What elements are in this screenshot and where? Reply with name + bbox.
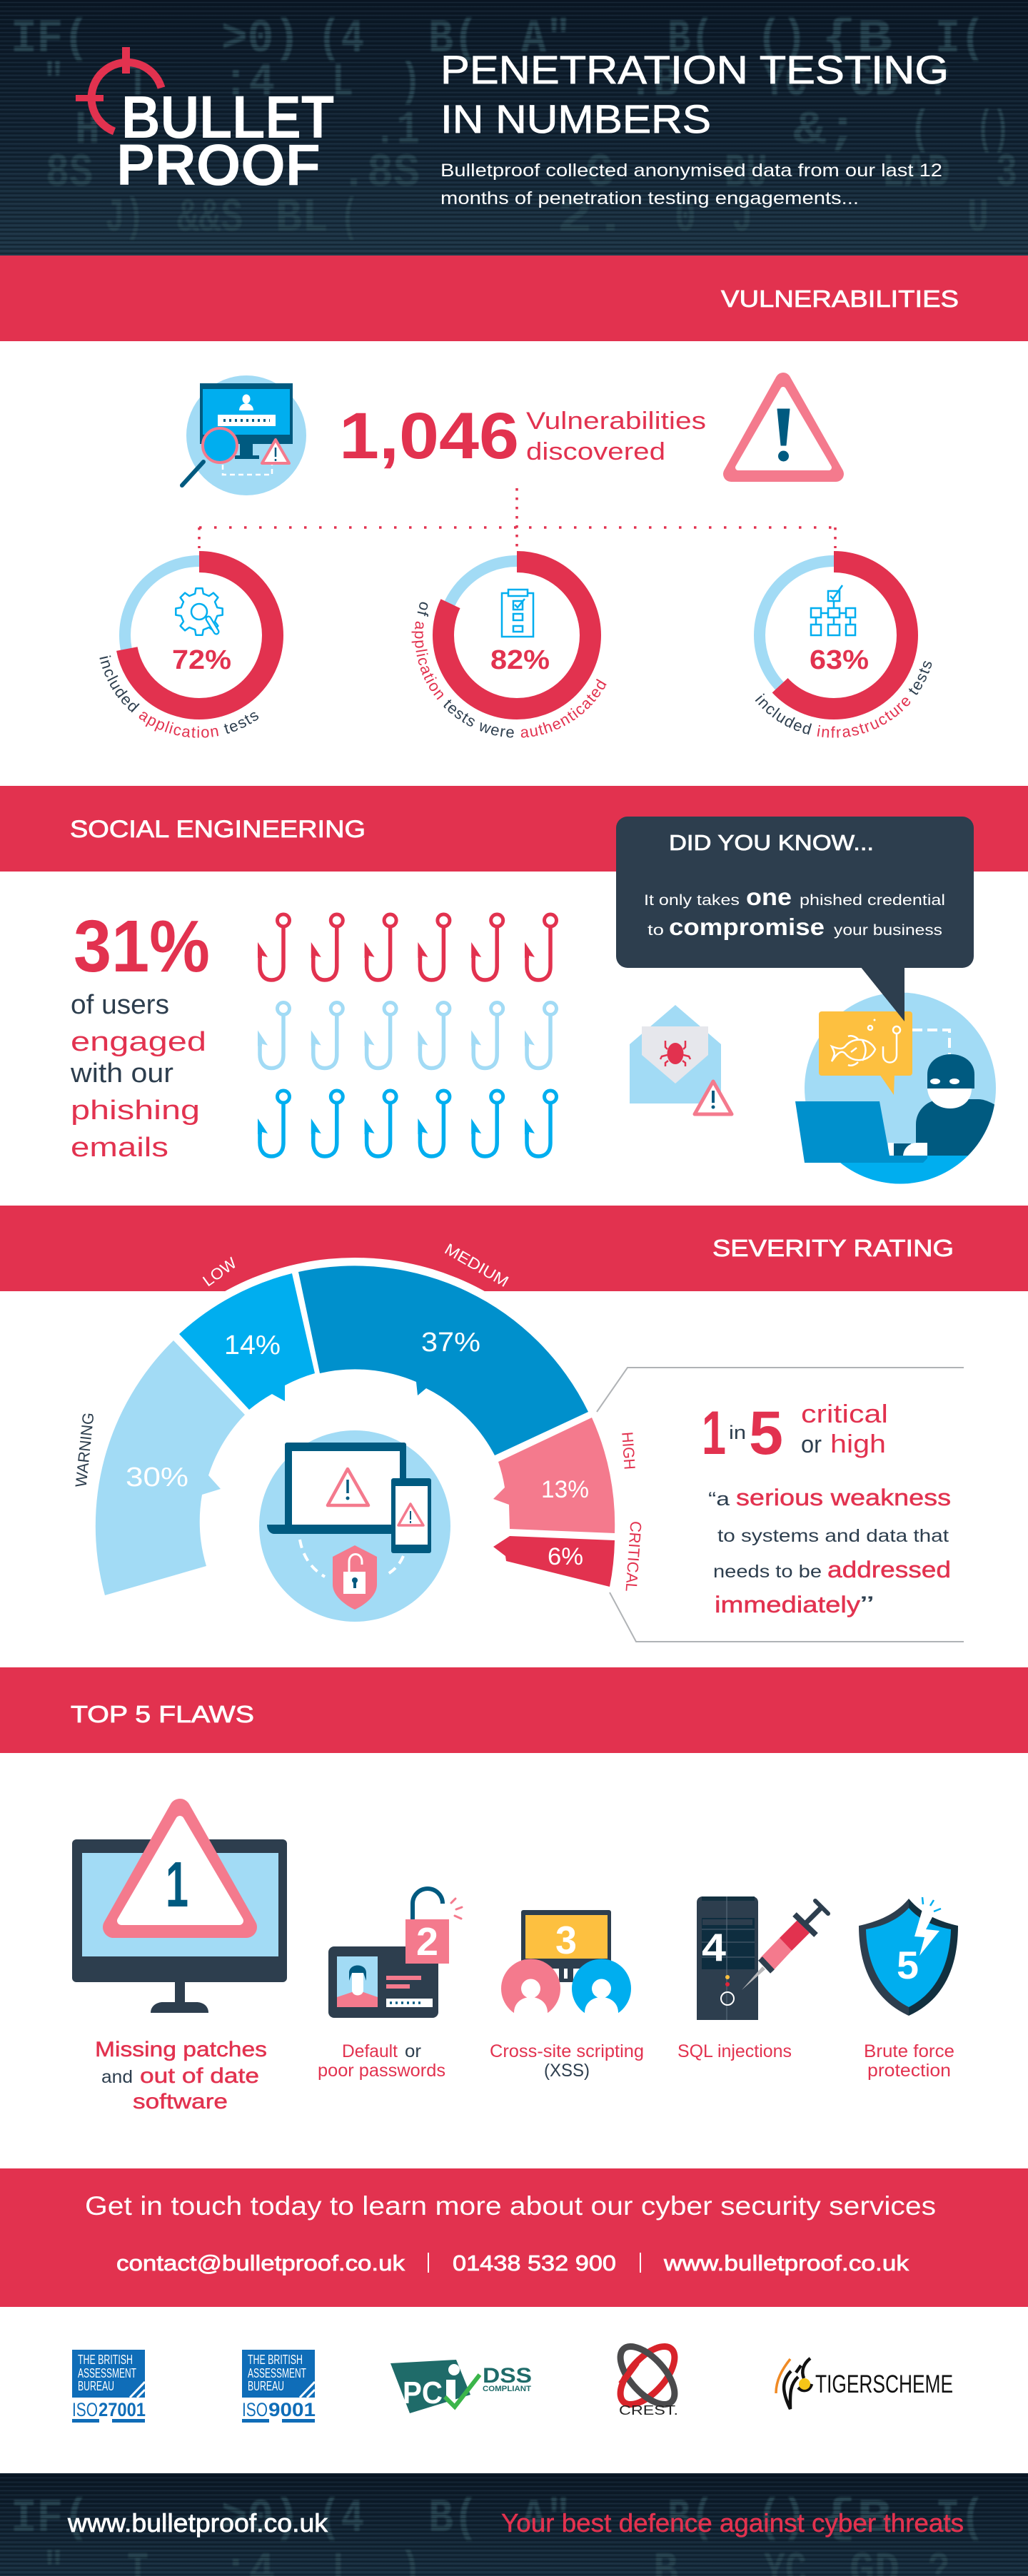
panel: header: B( — [667, 12, 714, 66]
segment: medium 37% — [298, 1266, 588, 1455]
callout: 1 in 5 critical or high: immediately — [715, 1592, 860, 1617]
panel: header: BL — [276, 191, 328, 245]
panel: footer: IF( — [11, 2492, 89, 2545]
panel: header: >0) — [221, 12, 300, 66]
callout: did you know: It only takes — [644, 892, 740, 909]
panel: header: 2. — [557, 191, 628, 245]
callout: did you know: one — [746, 884, 792, 910]
panel: header: L — [332, 56, 353, 109]
panel: header: .1 — [373, 103, 420, 157]
panel: header: {B — [821, 12, 892, 66]
labels: HIGH — [618, 1431, 639, 1470]
icon: hacker phishing — [795, 992, 999, 1188]
panel: footer: B( — [667, 2492, 714, 2545]
callout: did you know: to — [647, 922, 664, 939]
flaw 2 label: Default — [342, 2041, 398, 2061]
panel: header: GD — [850, 56, 900, 109]
flaw 2 label — [318, 2041, 445, 2081]
panel: header: BU — [725, 146, 767, 200]
logo: CREST — [611, 2338, 684, 2418]
panel: header — [0, 0, 1028, 256]
panel: header: B( — [428, 12, 478, 66]
panel: header: J) — [105, 191, 144, 245]
labels — [72, 1240, 645, 1592]
title: PENETRATION TESTING — [440, 47, 949, 92]
callout: 1 in 5 critical or high: addressed — [827, 1557, 951, 1582]
logo: ISO 9001: ASSESSMENT — [248, 2366, 306, 2380]
stat: 31% engaged — [70, 905, 210, 1163]
panel: header: U — [967, 191, 989, 245]
icon: network — [811, 585, 855, 635]
donut: 63% infrastructure tests — [754, 551, 932, 738]
panel: header: ? — [928, 56, 949, 109]
panel: header: 8S — [46, 146, 93, 200]
panel: header: .B — [628, 56, 678, 109]
panel: header: &; — [793, 103, 859, 157]
callout: 1 in 5 critical or high: 1 — [702, 1399, 726, 1468]
logo: Bulletproof — [76, 47, 334, 198]
flaw 2 label: or — [405, 2041, 421, 2061]
values: 13% — [541, 1476, 589, 1503]
dotted connectors — [199, 488, 835, 548]
callout: 1 in 5 critical or high: “a — [708, 1488, 730, 1510]
flaw 2: ID card with lock — [328, 1889, 462, 2018]
panel: header: G — [585, 146, 614, 200]
stat: 31% engaged: engaged — [71, 1027, 206, 1057]
section band: social engineering — [0, 786, 1028, 872]
donut: 82% authenticated: 82% — [490, 645, 550, 675]
panel: footer — [0, 2473, 1028, 2576]
values: 14% — [224, 1330, 281, 1360]
panel: header: () — [757, 12, 807, 66]
labels: CRITICAL — [623, 1520, 645, 1592]
stat: 31% engaged: 31% — [74, 905, 210, 987]
panel: header: .8S — [341, 146, 420, 200]
panel: header: ( — [910, 103, 930, 157]
flaw 5: shield with lightning — [859, 1897, 958, 2016]
labels: LOW — [199, 1253, 240, 1290]
callout: 1 in 5 critical or high: critical — [801, 1399, 888, 1428]
big number: 1,046 vulnerabilities: 1,046 — [339, 400, 519, 473]
flaw 4 label: SQL injections — [677, 2041, 792, 2061]
intro text: Bulletproof collected anonymised data from our last 12 — [440, 161, 942, 181]
panel: header: YC — [764, 56, 807, 109]
flaw 1: monitor with warning — [72, 1809, 287, 2013]
logo: Tigerscheme: TIGERSCHEME — [815, 2370, 953, 2398]
contact band — [0, 2168, 1028, 2307]
panel: footer: () — [757, 2492, 807, 2545]
flaw 1 label — [95, 2038, 267, 2113]
panel: footer: B( — [428, 2492, 478, 2545]
contact band: contact@bulletproof.co.uk — [116, 2251, 405, 2276]
logo: ISO 9001: BUREAU — [248, 2379, 284, 2393]
panel: header: T — [127, 56, 148, 109]
values — [126, 1328, 589, 1570]
logo: Bulletproof: PROOF — [116, 133, 321, 198]
title: IN NUMBERS — [440, 96, 711, 141]
section band: top 5 flaws — [0, 1667, 1028, 1753]
logo: ISO 9001: ISO — [242, 2399, 268, 2420]
donut: 72% application tests — [100, 551, 283, 738]
intro text — [440, 161, 942, 208]
pictogram: light blue hooks — [258, 1002, 557, 1068]
labels: MEDIUM — [442, 1240, 512, 1290]
logo: CREST: CREST. — [619, 2403, 678, 2418]
icon: gear — [176, 588, 223, 635]
flaw 5 label: Brute force — [864, 2041, 954, 2061]
icon: envelope with bug — [630, 1005, 732, 1114]
panel: header: " — [43, 56, 64, 109]
panel: header: I( — [935, 12, 985, 66]
flaw 3 label — [490, 2041, 644, 2081]
flaw 5 label — [864, 2041, 954, 2081]
flaw 3 label: (XSS) — [544, 2061, 590, 2081]
icon: clipboard — [502, 590, 533, 637]
panel: header: LAD — [882, 146, 950, 200]
panel: header: J — [732, 191, 753, 245]
panel: footer: I( — [935, 2492, 985, 2545]
panel: header: ) — [400, 56, 421, 109]
panel: header: &&S — [177, 191, 243, 245]
callout: did you know: your business — [834, 922, 942, 939]
section band: social engineering: SOCIAL ENGINEERING — [70, 816, 366, 843]
callout: did you know: phished credential — [800, 892, 945, 909]
stat: 31% engaged: emails — [71, 1133, 168, 1163]
callout: 1 in 5 critical or high: 5 — [749, 1399, 783, 1468]
flaw 4: server and syringe — [697, 1896, 828, 2020]
logo: ISO 9001: THE BRITISH — [248, 2353, 303, 2367]
contact band: 01438 532 900 — [453, 2251, 616, 2276]
panel: footer: A" — [521, 2492, 571, 2545]
callout: 1 in 5 critical or high: serious weakness — [736, 1485, 951, 1510]
logo: Bulletproof: BULLET — [121, 84, 334, 151]
labels: WARNING — [72, 1412, 97, 1488]
panel: footer: Your best defence against cyber threats — [501, 2508, 964, 2537]
panel: footer: {B — [821, 2492, 892, 2545]
big number: 1,046 vulnerabilities — [339, 400, 706, 473]
logo: Tigerscheme — [776, 2358, 953, 2409]
pictogram: red hooks — [258, 914, 557, 980]
logo: ISO 27001: ISO — [72, 2399, 98, 2420]
flaw 1 label: out of date — [140, 2064, 259, 2088]
logo: ISO 27001: BUREAU — [78, 2379, 114, 2393]
logo: ISO 27001: THE BRITISH — [78, 2353, 133, 2367]
flaw 3: cross-site scripting monitor and users: 3 — [555, 1918, 577, 1962]
big number: 1,046 vulnerabilities: Vulnerabilities — [526, 408, 706, 435]
callout: 1 in 5 critical or high: or — [801, 1431, 822, 1458]
panel: header: IF( — [11, 12, 89, 66]
donut: 82% authenticated: of application tests were authenticated — [411, 602, 607, 738]
contact band: www.bulletproof.co.uk — [663, 2251, 909, 2276]
callout: 1 in 5 critical or high: ” — [860, 1592, 874, 1617]
icon: warning triangle — [731, 380, 836, 474]
logo: ISO 27001 — [72, 2350, 146, 2421]
contact band: Get in touch today to learn more about our cyber security services — [85, 2191, 936, 2221]
gauge: severity breakdown — [76, 1243, 641, 1595]
section band: vulnerabilities: VULNERABILITIES — [721, 286, 959, 312]
stat: 31% engaged: of users — [71, 990, 169, 1020]
title — [440, 47, 949, 141]
segment: high 13% — [493, 1418, 615, 1533]
intro text: months of penetration testing engagements... — [440, 188, 859, 208]
pictogram: cyan hooks — [258, 1091, 557, 1156]
section band: severity rating — [0, 1206, 1028, 1291]
section band: vulnerabilities — [0, 256, 1028, 341]
flaw 4: server and syringe: 4 — [702, 1925, 726, 1969]
callout: 1 in 5 critical or high — [597, 1368, 964, 1642]
panel: header: A" — [521, 12, 571, 66]
logo: PCI DSS — [390, 2360, 532, 2413]
panel: footer: (4 — [318, 2492, 364, 2545]
logo: ISO 27001: 27001 — [99, 2399, 146, 2420]
logo: ISO 27001: ASSESSMENT — [78, 2366, 136, 2380]
callout: 1 in 5 critical or high: to systems and data that — [717, 1526, 949, 1546]
donut: 63% infrastructure tests: 63% — [810, 645, 869, 675]
big number: 1,046 vulnerabilities: discovered — [526, 438, 665, 465]
stat: 31% engaged: phishing — [71, 1096, 200, 1126]
segment: critical 6% — [493, 1536, 615, 1587]
values: 6% — [548, 1543, 583, 1570]
section band: top 5 flaws: TOP 5 FLAWS — [71, 1701, 254, 1727]
icon: devices with warning and open lock — [259, 1430, 450, 1622]
flaw 3 label: Cross-site scripting — [490, 2041, 644, 2061]
logo: PCI DSS: DSS — [483, 2364, 532, 2388]
donut: 72% application tests: 72% — [172, 645, 231, 675]
flaw 2: ID card with lock: 2 — [416, 1919, 438, 1964]
icon: monitor with magnifier — [182, 375, 306, 495]
panel: header: 3 — [996, 146, 1017, 200]
panel: footer: www.bulletproof.co.uk — [67, 2508, 328, 2537]
callout: 1 in 5 critical or high: in — [729, 1422, 746, 1443]
callout: did you know: DID YOU KNOW... — [669, 830, 874, 855]
flaw 2 label: poor passwords — [318, 2061, 445, 2081]
flaw 5 label: protection — [867, 2061, 951, 2081]
segment: warning 30% — [96, 1340, 245, 1595]
logo: ISO 9001: 9001 — [268, 2399, 316, 2420]
flaw 1 label: Missing patches — [95, 2038, 267, 2061]
flaw 3: cross-site scripting monitor and users — [501, 1910, 631, 2020]
segment: low 14% — [179, 1273, 315, 1410]
donut: 72% application tests: included application tests — [100, 655, 258, 738]
flaw 1 label: and — [101, 2067, 133, 2087]
values: 30% — [126, 1463, 188, 1492]
panel: header: :4 — [223, 56, 275, 109]
values: 37% — [421, 1328, 480, 1358]
panel: header: (4 — [318, 12, 364, 66]
panel: footer: >0) — [221, 2492, 300, 2545]
callout: 1 in 5 critical or high: needs to be — [713, 1562, 822, 1582]
flaw 1 label: software — [133, 2090, 228, 2113]
logo: ISO 9001 — [242, 2350, 316, 2421]
donut: 63% infrastructure tests: included infrastructure tests — [755, 661, 932, 738]
callout: 1 in 5 critical or high: high — [830, 1429, 886, 1458]
panel: header: 0 — [675, 191, 696, 245]
logo: PCI DSS: COMPLIANT — [483, 2385, 531, 2393]
section band: severity rating: SEVERITY RATING — [712, 1235, 954, 1261]
panel: header: H — [75, 103, 100, 157]
callout: did you know — [616, 817, 974, 1021]
logo: PCI DSS: PC — [403, 2375, 443, 2410]
callout: did you know: compromise — [669, 914, 825, 940]
stat: 31% engaged: with our — [70, 1059, 173, 1089]
flaw 1: monitor with warning: 1 — [166, 1849, 188, 1921]
panel: header: ( — [341, 191, 358, 245]
flaw 5: shield with lightning: 5 — [897, 1943, 919, 1987]
